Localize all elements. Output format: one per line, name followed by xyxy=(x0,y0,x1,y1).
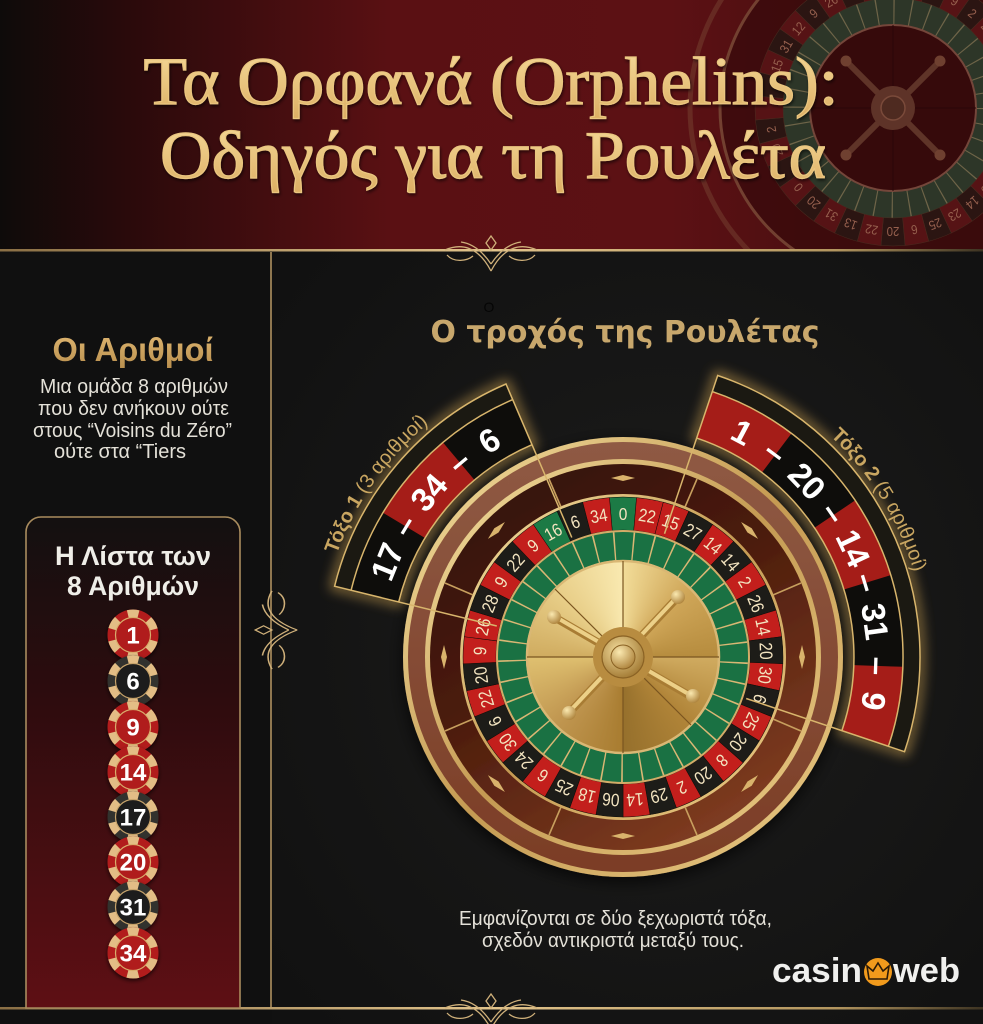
arc 2 numbers xyxy=(725,411,897,713)
chip 6: 6 xyxy=(126,668,140,696)
text block: numbers description xyxy=(33,375,232,463)
panel: list of 8 numbers xyxy=(26,517,240,1008)
number ring: 25 xyxy=(552,774,576,800)
chip 9: 9 xyxy=(126,714,140,742)
arc 2 numbers: – xyxy=(813,495,854,531)
number ring: 6 xyxy=(534,765,552,786)
number ring: 27 xyxy=(680,519,705,545)
number ring: 14 xyxy=(751,616,774,637)
arc 2 numbers: 9 xyxy=(854,689,893,713)
text block: numbers description: που δεν ανήκουν ούτε xyxy=(38,397,229,420)
text block: numbers description: Μια ομάδα 8 αριθμών xyxy=(40,375,228,398)
arc 2 highlight xyxy=(664,376,926,752)
arc 2 glow xyxy=(697,376,920,752)
arc 1 label text: Τόξο 1 (3 αριθμοί) xyxy=(324,415,428,550)
number ring: 26 xyxy=(743,592,768,616)
arc 2 numbers: 1 xyxy=(725,411,759,453)
number ring: 9 xyxy=(523,535,543,556)
chip 14: 14 xyxy=(120,760,147,786)
number ring: 30 xyxy=(495,729,521,755)
arc 1 frame lines xyxy=(335,384,572,626)
number ring: 6 xyxy=(749,692,771,706)
number ring: 20 xyxy=(755,642,776,660)
number ring: 8 xyxy=(712,750,732,771)
faded roulette wheel: 6 xyxy=(910,222,919,237)
logo: casinoweb: casin xyxy=(772,952,862,990)
logo: casinoweb: web xyxy=(892,952,960,990)
number ring: 2 xyxy=(734,573,756,591)
chip 34: 34 xyxy=(120,940,147,968)
logo: casinoweb xyxy=(772,952,960,990)
number ring: 30 xyxy=(754,665,776,685)
arc 2 red segments xyxy=(697,392,903,746)
chip 17: 17 xyxy=(120,804,146,832)
bottom divider with ornament xyxy=(0,994,983,1024)
header banner xyxy=(46,0,983,249)
chip 20: 20 xyxy=(120,850,146,876)
title: Τα Ορφανά (Orphelins): xyxy=(144,43,838,119)
faded roulette wheel: 15 xyxy=(768,57,786,74)
number ring: 9 xyxy=(470,646,491,656)
wheel rim xyxy=(403,437,843,877)
faded roulette wheel: 2 xyxy=(764,125,779,134)
arc 2 outer band xyxy=(697,376,920,752)
faded roulette wheel: 20 xyxy=(886,224,899,239)
number ring xyxy=(463,497,783,818)
header divider with ornament xyxy=(0,236,983,271)
faded roulette wheel: 25 xyxy=(926,215,944,233)
arc 2 numbers: – xyxy=(757,432,794,472)
number ring: 22 xyxy=(637,505,657,528)
arc 1 numbers: 17 xyxy=(363,538,411,586)
arc 2 numbers: 31 xyxy=(854,601,896,642)
faded roulette wheel: 31 xyxy=(822,205,841,224)
faded roulette wheel: 20 xyxy=(768,141,786,159)
heading: the roulette wheel: Ο xyxy=(484,299,495,315)
arc 1 numbers: 34 xyxy=(403,466,455,518)
arc 2 numbers: 14 xyxy=(829,524,878,573)
faded roulette wheel: 13 xyxy=(842,215,859,233)
arc 2 label text: Τόξο 2 (5 αριθμοί) xyxy=(834,426,926,570)
chip 31 xyxy=(108,882,158,932)
number ring: 0 xyxy=(619,504,627,524)
panel heading xyxy=(55,541,211,601)
number ring: 14 xyxy=(626,789,645,810)
faded roulette wheel: 31 xyxy=(777,37,796,56)
panel heading: 8 Αριθμών xyxy=(67,571,199,601)
number ring: 24 xyxy=(511,747,537,773)
arc 1 red segment xyxy=(383,442,474,538)
heading: the roulette wheel: Ο τροχός της Ρουλέτας xyxy=(430,315,820,350)
faded roulette wheel: 22 xyxy=(864,221,879,238)
number ring: 14 xyxy=(717,549,744,576)
rim diamonds xyxy=(441,475,805,839)
rim ticks xyxy=(445,479,801,835)
number ring: 15 xyxy=(659,510,682,535)
number ring: 2 xyxy=(674,776,690,798)
number ring: 14 xyxy=(700,532,726,559)
arc 1 outer band xyxy=(335,384,532,602)
title: Οδηγός για τη Ρουλέτα xyxy=(160,117,826,193)
faded roulette wheel xyxy=(688,0,983,249)
text block: numbers description: ούτε στα “Tiers xyxy=(54,440,186,463)
number ring: 16 xyxy=(541,519,566,545)
spokes and knobs xyxy=(547,590,700,720)
text block: arcs caption: σχεδόν αντικριστά μεταξύ τους. xyxy=(482,929,744,952)
number ring: 28 xyxy=(478,592,503,616)
arc 1 number band xyxy=(351,400,532,602)
chip 9 xyxy=(108,702,158,752)
arc 2 numbers: 20 xyxy=(781,455,833,507)
faded roulette wheel: 20 xyxy=(804,193,823,212)
number ring: 20 xyxy=(690,762,716,789)
arc 1 label path xyxy=(324,394,471,604)
chip 20 xyxy=(108,836,158,888)
number ring: 9 xyxy=(490,573,512,591)
vertical divider with ornament xyxy=(255,252,297,1008)
gold hub xyxy=(526,560,720,754)
number ring: 22 xyxy=(502,549,529,576)
arc 1 numbers: – xyxy=(440,441,478,481)
faded roulette wheel: 12 xyxy=(789,19,808,38)
chip 6 xyxy=(108,656,158,706)
faded roulette wheel: 2 xyxy=(965,6,980,21)
chip 34 xyxy=(108,928,158,978)
number ring: 6 xyxy=(568,511,583,533)
text block: numbers description: στους “Voisins du Zéro” xyxy=(33,419,232,442)
faded roulette wheel: 23 xyxy=(945,205,964,224)
roulette wheel xyxy=(403,437,843,877)
number ring: 20 xyxy=(725,729,751,755)
text block: arcs caption: Εμφανίζονται σε δύο ξεχωριστά τόξα, xyxy=(459,907,772,930)
icon: crown chip xyxy=(864,958,892,986)
number ring: 20 xyxy=(470,665,492,685)
arc 1 numbers: – xyxy=(383,508,425,543)
chip 14 xyxy=(108,746,158,798)
arc 2 label path xyxy=(774,395,926,641)
faded roulette wheel: 0 xyxy=(791,180,806,194)
chip 17 xyxy=(108,792,158,842)
arc 2 numbers: – xyxy=(860,656,897,676)
chip 1: 1 xyxy=(126,622,140,650)
arc 2 frame lines xyxy=(664,376,920,752)
arc 2 number band xyxy=(697,392,903,746)
number ring: 29 xyxy=(648,783,670,807)
faded roulette wheel: 14 xyxy=(962,193,982,212)
green pocket ring xyxy=(486,520,760,794)
number ring: 6 xyxy=(484,713,506,730)
title xyxy=(144,43,838,193)
heading: the roulette wheel xyxy=(430,299,820,350)
panel heading: Η Λίστα των xyxy=(55,541,211,571)
heading: the numbers: Οι Αριθμοί xyxy=(52,331,214,368)
number ring: 25 xyxy=(738,709,764,734)
number ring: 34 xyxy=(589,505,609,528)
chip 31: 31 xyxy=(120,894,146,922)
arc 1 numbers xyxy=(363,420,507,586)
arc 1 numbers: 6 xyxy=(472,420,507,461)
arc 2 numbers: – xyxy=(847,568,888,596)
number ring: 22 xyxy=(474,688,499,710)
chip 1 xyxy=(108,610,158,660)
number ring: 06 xyxy=(601,789,620,810)
arc 1 glow xyxy=(335,384,532,602)
number ring: 26 xyxy=(472,616,495,637)
arc 1 highlight xyxy=(324,384,572,626)
text block: arcs caption xyxy=(459,907,772,952)
faded roulette wheel: 9 xyxy=(807,6,821,21)
number ring: 18 xyxy=(576,783,598,807)
